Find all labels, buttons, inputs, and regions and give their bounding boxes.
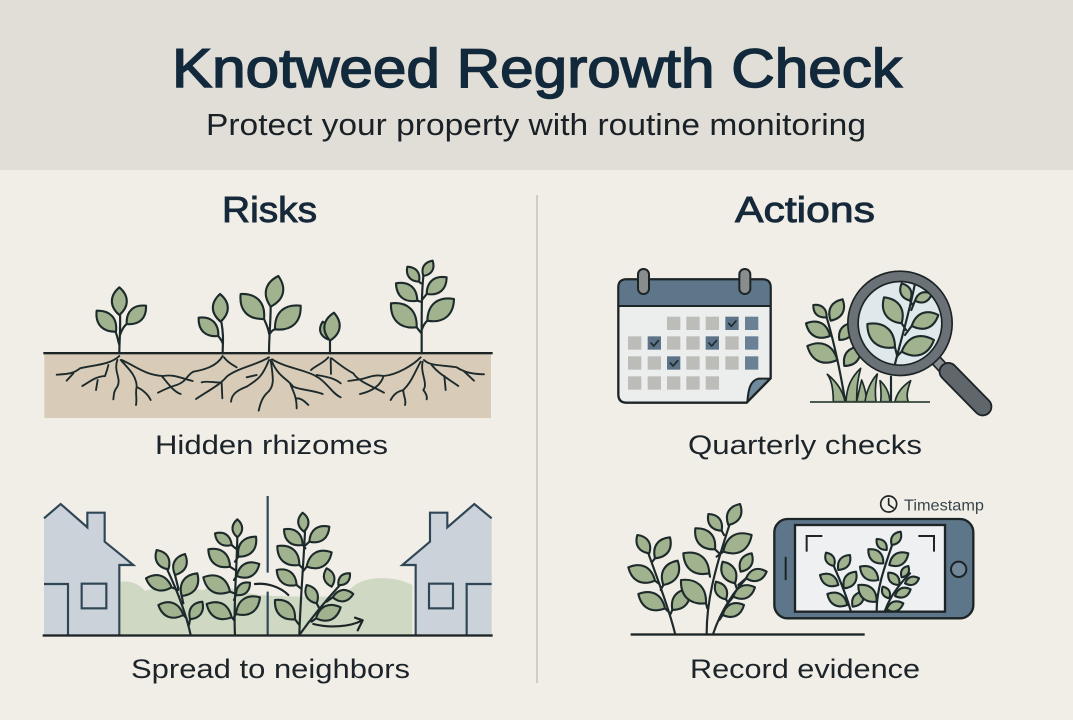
property line [264, 496, 271, 635]
lens ring [853, 276, 947, 370]
lens [858, 282, 942, 365]
arrow across boundary [255, 584, 288, 595]
phone [774, 519, 973, 618]
caption: record evidence: Record evidence [690, 654, 920, 684]
illustration: record evidence [625, 496, 984, 636]
plant stems [115, 276, 427, 353]
leaves [144, 512, 354, 625]
timestamp label [881, 496, 984, 515]
heading: risks: Risks [222, 189, 317, 230]
title: Knotweed Regrowth Check [172, 37, 903, 99]
grass [827, 368, 911, 402]
roots [57, 356, 484, 411]
caption: quarterly checks: Quarterly checks [688, 430, 922, 460]
ground line [43, 352, 493, 354]
ground line [43, 634, 493, 637]
viewfinder corners [807, 536, 934, 552]
illustration: spread to neighbors [43, 496, 493, 637]
ground line [631, 633, 865, 636]
subtitle: Protect your property with routine monitoring [206, 107, 866, 142]
timestamp label: Timestamp [904, 498, 984, 515]
icon: calendar [618, 269, 771, 403]
heading: actions: Actions [735, 189, 875, 230]
left house [44, 504, 133, 635]
real plants [625, 501, 768, 633]
on-screen plants [817, 529, 920, 614]
icon: magnifier over plant [803, 276, 983, 407]
illustration: hidden rhizomes [43, 258, 493, 418]
arrow spreading right [313, 618, 363, 630]
caption: spread to neighbors: Spread to neighbors [131, 654, 410, 684]
outside plant [803, 296, 891, 402]
plant stems [167, 532, 340, 635]
caption: hidden rhizomes: Hidden rhizomes [155, 430, 388, 460]
soil [44, 354, 491, 418]
handle [937, 362, 983, 407]
header band [0, 0, 1073, 170]
leaves [91, 258, 460, 342]
right house [402, 504, 492, 635]
green hedge [121, 578, 412, 635]
